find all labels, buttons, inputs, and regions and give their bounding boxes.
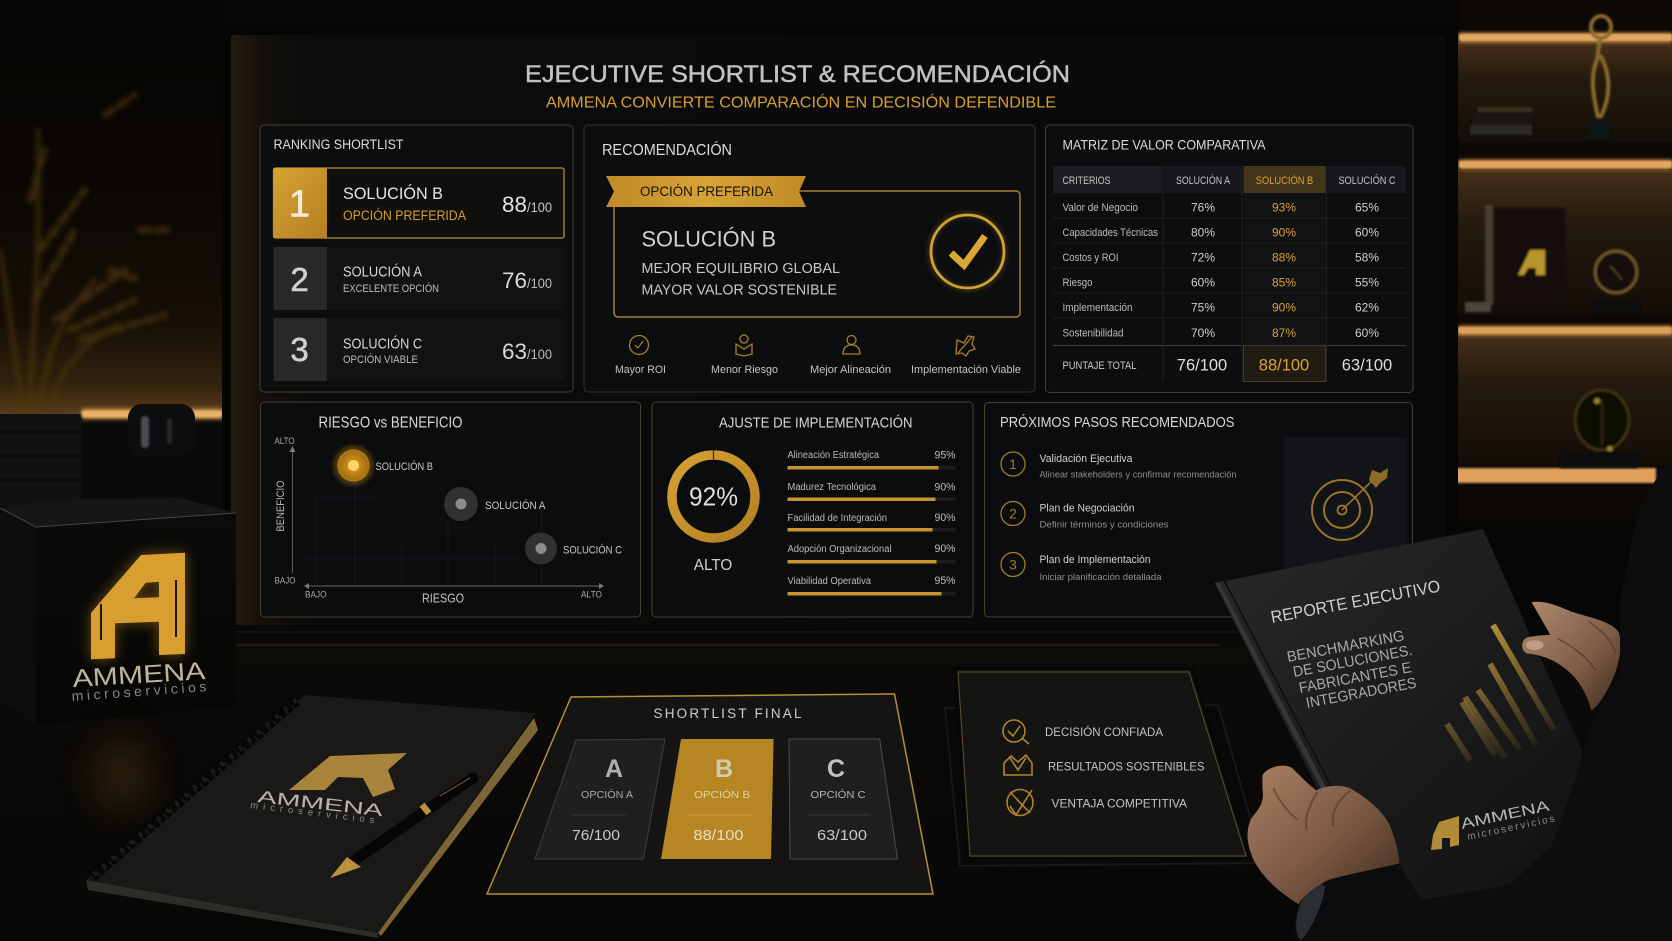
donut gauge: ALTO [694,557,732,574]
comparison table: Riesgo [1062,277,1092,289]
shelf lights left [82,409,223,419]
step 1: 1 [1009,457,1017,472]
books on shelf [1470,107,1532,135]
implementation bars: Alineación Estratégica [788,450,879,461]
book subtitle [1286,627,1418,712]
step 2 [1001,502,1169,530]
benefit: implementación viable: Implementación Viable [911,364,1021,376]
comparison table: CRITERIOS [1062,175,1110,187]
card: opción C [789,739,898,859]
comparison table: SOLUCIÓN B [1256,174,1313,187]
comparison table: 60% [1191,276,1215,290]
rank 2 row: 2 [290,261,309,298]
implementation bars: Madurez Tecnológica [788,482,876,493]
recommended solution text: SOLUCIÓN B [642,226,776,252]
book logo: AMMENA [1459,798,1551,833]
subtitle: AMMENA CONVIERTE COMPARACIÓN EN DECISIÓN DEFENDIBLE [546,92,1056,112]
comparison table: PUNTAJE TOTAL [1062,360,1136,372]
implementation bars: 95% [934,450,956,462]
step 2: Plan de Negociación [1040,502,1134,514]
ranking heading: RANKING SHORTLIST [274,137,404,152]
scatter chart: ALTO [274,436,294,447]
book subtitle: BENCHMARKING [1286,627,1406,666]
recommended solution text: MAYOR VALOR SOSTENIBLE [642,282,837,298]
benefit: resultados sostenibles [1004,755,1205,775]
book bar chart [1447,625,1554,760]
card: opción C: 63/100 [817,828,867,844]
executive report book [1215,529,1640,941]
comparison table: Costos y ROI [1062,252,1118,264]
icon: check badge [930,214,1004,288]
panel: recomendación [584,125,1035,392]
comparison table: 70% [1191,326,1215,340]
comparison table: Capacidades Técnicas [1062,227,1158,239]
step 3: Plan de Implementación [1040,554,1150,566]
comparison table: Sostenibilidad [1062,328,1124,340]
scatter chart: BAJO [305,590,326,600]
comparison table: 93% [1272,200,1296,214]
box with logo on shelf [1465,205,1565,312]
book subtitle: INTEGRADORES [1305,675,1418,712]
implementation bars: 90% [934,482,956,494]
implementation bars [788,450,956,596]
comparison table: 62% [1355,300,1379,314]
step 1: Validación Ejecutiva [1040,453,1133,465]
shortlist final heading: SHORTLIST FINAL [654,706,802,721]
step 3: 3 [1009,558,1017,572]
ribbon: opción preferida [606,176,806,207]
logo wordmark on notebook [250,787,385,826]
pen [330,778,473,878]
tablet [945,668,1263,866]
rank 3 row: 3 [290,331,309,368]
panel: matriz de valor [1046,125,1413,392]
benefit: mejor alineación [810,336,891,376]
card: opción C: C [827,755,845,783]
ajuste heading: AJUSTE DE IMPLEMENTACIÓN [719,414,912,432]
step 2: Definir términos y condiciones [1040,520,1169,530]
rank 3 row [274,318,564,381]
cube with logo [0,498,236,725]
comparison table: 85% [1272,276,1296,290]
comparison table: 55% [1355,276,1379,290]
recommended solution text: MEJOR EQUILIBRIO GLOBAL [642,260,840,277]
notebook [86,695,538,938]
recommendation card [614,191,1020,317]
logo wordmark on notebook: AMMENA [257,787,385,820]
ornament on shelf [1560,390,1638,468]
card: opción B [661,739,774,859]
comparison table: 72% [1191,250,1215,264]
left hand [1248,766,1399,904]
recomendación heading: RECOMENDACIÓN [602,142,732,159]
point: solución C [525,532,622,564]
logo wordmark on notebook: microservicios [250,800,375,826]
book logo [1431,798,1556,850]
person jacket [1296,465,1672,941]
benefit: ventaja competitiva [1007,790,1187,816]
step 3 [1001,552,1162,583]
benefit: implementación viable [911,336,1021,376]
title: EJECUTIVE SHORTLIST & RECOMENDACIÓN [525,61,1070,88]
card: opción A [535,739,665,859]
card: opción B: OPCIÓN B [694,788,750,801]
benefit: ventaja competitiva: VENTAJA COMPETITIVA [1052,798,1187,810]
shortlist final board [487,694,933,894]
comparison table: SOLUCIÓN A [1176,174,1231,187]
comparison table: 88/100 [1259,356,1309,374]
implementation bars: 95% [934,575,956,587]
step 1 [1001,452,1236,480]
comparison table: 60% [1355,226,1379,240]
comparison table: 87% [1272,326,1296,340]
logo mark on notebook [289,753,407,797]
comparison table: 88% [1272,250,1296,264]
benefit: mayor ROI [615,336,666,376]
point: solución C: SOLUCIÓN C [563,544,622,556]
benefit: menor riesgo: Menor Riesgo [711,364,778,376]
panel: riesgo vs beneficio [260,402,640,617]
comparison table: 90% [1272,226,1296,240]
point: solución B: SOLUCIÓN B [376,460,433,473]
comparison table: 80% [1191,226,1215,240]
icon: target card [1284,438,1406,588]
rank 3 row: /100 [527,346,552,362]
ribbon: opción preferida: OPCIÓN PREFERIDA [640,183,774,199]
scatter chart: BENEFICIO [275,480,287,532]
panel: ajuste de implementación [652,402,973,617]
comparison table: SOLUCIÓN C [1338,174,1396,187]
point: solución A [444,487,546,521]
comparison table: 60% [1355,326,1379,340]
table reflection [88,735,156,815]
rank 2 row: /100 [527,275,552,291]
card: opción B: 88/100 [694,828,744,844]
rank 1 row: SOLUCIÓN B [343,184,443,203]
rank 3 row: OPCIÓN VIABLE [343,353,418,366]
implementation bars: 90% [934,543,956,555]
step 3: Iniciar planificación detallada [1040,572,1162,583]
book logo: microservicios [1466,814,1556,843]
próximos pasos heading: PRÓXIMOS PASOS RECOMENDADOS [1000,414,1234,431]
step 1: Alinear stakeholders y confirmar recomendación [1040,470,1236,480]
wrist watch [1295,863,1404,941]
rank 3 row: 63 [502,339,527,364]
recommended solution text [642,226,840,298]
rank 2 row: SOLUCIÓN A [343,264,422,280]
comparison table: Implementación [1062,302,1132,314]
comparison table: 65% [1355,200,1379,214]
matriz heading: MATRIZ DE VALOR COMPARATIVA [1062,136,1266,152]
rank 2 row: 76 [502,268,527,293]
clock on shelf [1590,251,1640,313]
plant pot [0,414,81,506]
comparison table: 90% [1272,300,1296,314]
rank 1 row: 88 [502,192,527,217]
rank 1 row: /100 [527,199,552,215]
comparison table: 63/100 [1342,356,1392,374]
logo mark on cube [91,553,185,659]
monitor [220,28,1458,646]
rank 3 row: SOLUCIÓN C [343,336,422,352]
book subtitle: FABRICANTES E [1298,659,1413,697]
card: opción B: B [715,755,733,783]
donut gauge [672,450,755,574]
scatter chart: RIESGO [422,590,464,606]
vase [128,404,195,456]
card: opción A: A [605,755,623,783]
implementation bars: Viabilidad Operativa [788,576,871,587]
implementation bars: 90% [934,512,956,524]
benefit: mejor alineación: Mejor Alineación [810,364,891,376]
rank 2 row: EXCELENTE OPCIÓN [343,282,439,295]
comparison table: Valor de Negocio [1062,202,1138,214]
comparison table: 76% [1191,200,1215,214]
book heading: REPORTE EJECUTIVO [1269,577,1442,627]
scatter chart [274,436,622,606]
implementation bars: Adopción Organizacional [788,544,892,555]
book subtitle: DE SOLUCIONES. [1292,642,1414,681]
benefit: menor riesgo [711,335,778,376]
trophy on shelf [1588,16,1611,139]
panel: ranking shortlist [260,125,573,392]
logo wordmark on cube [71,657,207,704]
scatter heading: RIESGO vs BENEFICIO [318,414,462,432]
step 2: 2 [1009,506,1017,522]
comparison table: 75% [1191,300,1215,314]
scatter chart: BAJO [274,576,296,586]
point: solución A: SOLUCIÓN A [485,499,546,512]
benefit: resultados sostenibles: RESULTADOS SOSTENIBLES [1048,762,1205,774]
card: opción A: 76/100 [572,828,620,844]
implementation bars: Facilidad de Integración [788,513,887,524]
scatter chart: ALTO [581,590,602,600]
card: opción A: OPCIÓN A [581,788,633,801]
logo wordmark on cube: AMMENA [72,657,207,693]
comparison table: 76/100 [1177,356,1227,374]
logo wordmark on cube: microservicios [71,678,207,704]
rank 1 row [274,168,564,238]
card: opción C: OPCIÓN C [810,788,866,801]
plant decoration [0,95,170,412]
rank 2 row [274,247,564,310]
comparison table: 58% [1355,250,1379,264]
benefit: decisión confiada [1003,720,1163,744]
rank 1 row: OPCIÓN PREFERIDA [343,208,466,223]
point: solución B [334,446,433,486]
panel: próximos pasos [984,402,1412,617]
benefit: mayor ROI: Mayor ROI [615,364,666,376]
rank 1 row: 1 [289,184,310,226]
comparison table [1053,166,1406,382]
right hand [1522,602,1620,710]
shelves right [1456,33,1672,483]
benefit: decisión confiada: DECISIÓN CONFIADA [1045,726,1163,739]
donut gauge: 92% [689,482,738,512]
